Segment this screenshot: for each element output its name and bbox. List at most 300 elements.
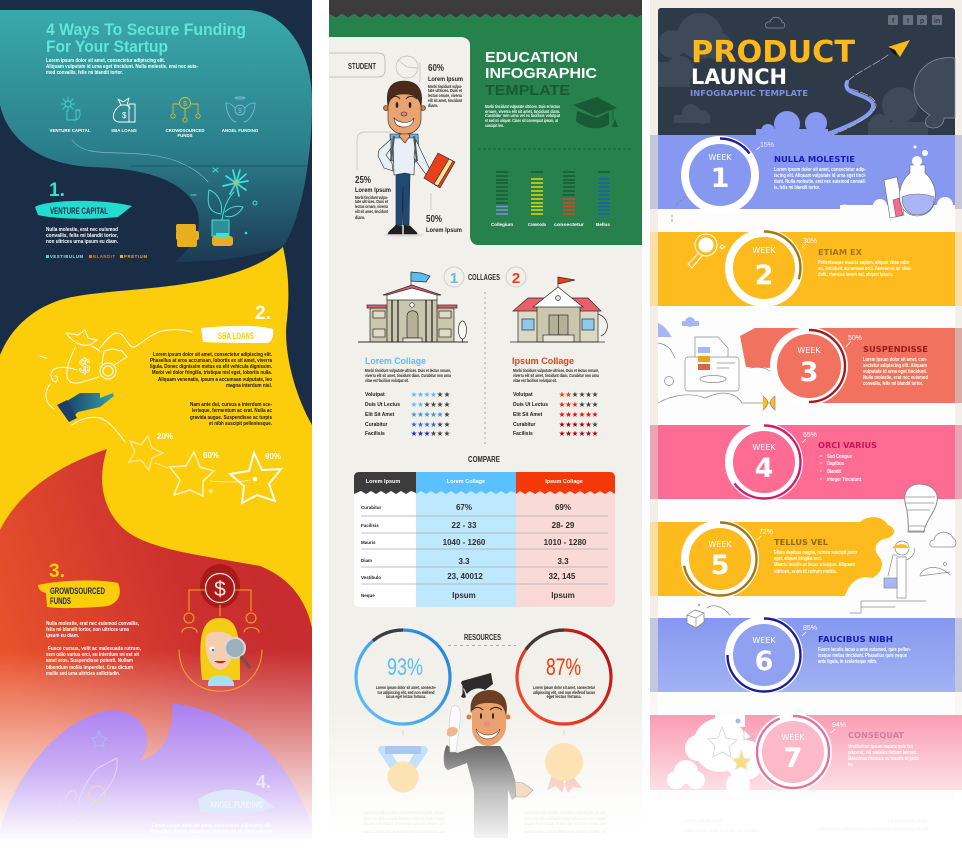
stat ring 87 percent: adipiscing elit, sed non eleifend lacus bbox=[533, 690, 595, 695]
college one ratings: ★★★ bbox=[430, 429, 451, 438]
faded footer text: Lorem ipsum dolor bbox=[888, 818, 929, 823]
step 1 label: VENTURE CAPITAL bbox=[50, 206, 108, 216]
college one ratings bbox=[365, 390, 451, 438]
icon: graduation cap bbox=[573, 97, 618, 128]
step 3 text: amet eros. Suspendisse potenti. Nullam bbox=[46, 658, 134, 664]
social icons bbox=[888, 15, 942, 25]
star rating 90%: 90% bbox=[265, 452, 281, 461]
template text: suscipit leo. bbox=[485, 123, 504, 128]
week 2 ring: WEEK bbox=[752, 246, 776, 255]
college one ratings: ★★ bbox=[437, 390, 451, 399]
step 2 paragraph two bbox=[190, 402, 273, 427]
title: 4 Ways To Secure Funding bbox=[46, 20, 246, 39]
row labels: Facilisis bbox=[361, 523, 379, 528]
bar labels: consectetur bbox=[554, 222, 584, 227]
stat ring 87 percent bbox=[517, 630, 611, 724]
product launch title bbox=[690, 35, 856, 98]
college one description: vitae est facilisis volutpat sit. bbox=[365, 378, 409, 383]
colleges heading bbox=[444, 267, 526, 287]
icon: paper plane bbox=[888, 40, 910, 57]
week 4 text: Sed Congue bbox=[827, 454, 852, 460]
graduate character bbox=[444, 673, 533, 838]
resources heading bbox=[448, 633, 516, 646]
step 3 text: ipsum eu diam. bbox=[46, 633, 80, 639]
icon: hand bbox=[57, 393, 114, 422]
icon labels: SBA LOANS bbox=[111, 128, 137, 133]
week 5 text: TELLUS VEL bbox=[774, 538, 828, 547]
week 4 text: Blandit bbox=[827, 469, 841, 475]
week 7 text: in. bbox=[848, 762, 854, 768]
header panel: t bbox=[907, 18, 910, 25]
icon: dollar network bbox=[179, 564, 262, 691]
faded awards text left: aliquam erat volutpat. Ut wisi enim ad minim veniam, quis bbox=[363, 821, 446, 826]
week 2 text: Pellentesque mauris sapien, aliquet vitae odio bbox=[818, 260, 909, 266]
college two ratings bbox=[513, 390, 599, 438]
header panel: f bbox=[892, 18, 895, 25]
step 4 label bbox=[198, 790, 274, 815]
college two ratings: ★★★★ bbox=[572, 390, 599, 399]
legend: VESTIBULUM bbox=[50, 254, 84, 259]
icon labels: VENTURE CAPITAL bbox=[50, 128, 91, 133]
intro text: mod convallis, felis mi blandit tortor. bbox=[46, 70, 124, 76]
cloud with stars illustration bbox=[667, 715, 765, 797]
week 3 text: SUSPENDISSE bbox=[863, 345, 928, 354]
resources heading: RESOURCES bbox=[464, 633, 501, 642]
legend: BLANDIT bbox=[93, 254, 115, 259]
title: For Your Startup bbox=[46, 37, 168, 56]
star rating 90% bbox=[230, 452, 281, 503]
stat 25 percent: elit sit amet, tincidunt bbox=[355, 209, 388, 214]
college one ratings: Volutpat bbox=[365, 392, 385, 398]
faded awards text left bbox=[363, 810, 446, 834]
stat 25 percent bbox=[355, 132, 391, 220]
row values: 3.3 bbox=[557, 557, 569, 566]
template text: Curabitur non urna vel ex facilisis volutpat bbox=[485, 113, 560, 118]
stat 60 percent: Lorem Ipsum bbox=[428, 77, 463, 83]
week 6 text bbox=[818, 635, 911, 665]
step 4 number: 4. bbox=[256, 772, 271, 792]
step 2 paragraph one bbox=[150, 352, 273, 389]
week 6 percent: 85% bbox=[803, 625, 817, 632]
week 3 percent: 50% bbox=[848, 335, 862, 342]
icon: rosette bbox=[545, 743, 583, 793]
icon: cube bbox=[687, 604, 730, 628]
college two ratings: Volutpat bbox=[513, 392, 533, 398]
week 3 percent bbox=[846, 335, 862, 347]
intro text: Aliquam vulputate id urna eget tincidunt. Nulla molestie, erat nec auis- bbox=[46, 64, 198, 70]
purple shape bbox=[0, 703, 312, 858]
stat ring 93 percent: Lorem ipsum dolor sit amet, consecte- bbox=[376, 685, 436, 690]
stat 25 percent: diam. bbox=[355, 215, 365, 220]
step 2 paragraph one: Phasellus at eros accumsan, lobortis ex sit amet, viverra bbox=[150, 358, 272, 364]
week 2 text: dolit, rhoncus lorem vel, aliquet ipsum. bbox=[818, 272, 893, 278]
stat ring 93 percent bbox=[356, 630, 450, 724]
faded awards text right: nostrud exerci tation ullamcorper suscipit lobortis nisl bbox=[524, 829, 606, 834]
week 2 text: ETIAM EX bbox=[818, 248, 863, 257]
icon: angel funding: $ bbox=[238, 108, 242, 115]
week 3 ring: 3 bbox=[800, 357, 818, 388]
week 7 text bbox=[848, 731, 919, 768]
bar labels: Commodo bbox=[528, 222, 546, 227]
step 3 text: felis mi blandit tortor, non ultrices urna bbox=[46, 627, 129, 633]
week 4 ring: WEEK bbox=[752, 443, 776, 452]
yellow shape bbox=[0, 247, 312, 858]
icon labels bbox=[50, 128, 259, 138]
week 5 text: ultrices, enim id rutrum mattis. bbox=[774, 569, 838, 575]
week 4 band bbox=[650, 425, 962, 499]
faded awards text left: Lorem ipsum dolor sit amet, consectetur adipiscing elit, sed diam bbox=[363, 810, 445, 815]
header clouds bbox=[658, 13, 928, 136]
stat 60 percent: Morbi tincidunt vulpu- bbox=[428, 84, 462, 89]
step 3 text bbox=[46, 621, 142, 677]
row values: 23, 40012 bbox=[447, 572, 483, 581]
college one description: Lorem Collage bbox=[365, 356, 426, 366]
college two ratings: ★★★ bbox=[579, 400, 599, 409]
week 6 text: FAUCIBUS NIBH bbox=[818, 635, 893, 644]
week 7 ring: 7 bbox=[784, 743, 802, 774]
stat 25 percent: tate ultrices. Duis et bbox=[355, 199, 388, 204]
college one ratings: ★★★★★ bbox=[411, 410, 444, 419]
college one ratings: Facilisis bbox=[365, 431, 385, 437]
stat 60 percent: lectus ornare, viverra bbox=[428, 93, 462, 98]
step 1 text: Nulla molestie, erat nec euismod bbox=[46, 227, 118, 233]
icon labels: CROWDSOURCED bbox=[165, 128, 205, 133]
product launch title: LAUNCH bbox=[691, 65, 787, 89]
week 4 text bbox=[818, 441, 877, 483]
college one ratings: Duis Ut Lectus bbox=[365, 402, 400, 408]
icon: gold coins bbox=[176, 224, 233, 247]
faded awards text left: nostrud exerci tation ullamcorper suscipit lobortis nisl bbox=[363, 829, 445, 834]
row values bbox=[443, 503, 587, 600]
product launch title: INFOGRAPHIC TEMPLATE bbox=[690, 89, 808, 98]
intro text: Lorem ipsum dolor sit amet, consectetur adipiscing elit. bbox=[46, 58, 166, 64]
step 1 label bbox=[35, 201, 132, 219]
stat ring 87 percent: eget lectus fortuna. bbox=[546, 694, 582, 699]
icon: money bag bbox=[113, 98, 135, 122]
week 4 percent bbox=[802, 432, 817, 443]
week 6 ring bbox=[728, 618, 800, 692]
week 3 text: vulputate id urna eget tincidunt. bbox=[863, 369, 928, 375]
stat 60 percent bbox=[428, 63, 463, 108]
icon: money bag and ring: $ bbox=[79, 356, 90, 378]
student tag bbox=[329, 53, 385, 77]
icon: light bulb person bbox=[850, 484, 956, 613]
row values: 1010 - 1280 bbox=[544, 538, 587, 547]
product launch title: PRODUCT bbox=[691, 35, 856, 70]
template text: et sed mi aliquet. Class sit consequat ipsum, at bbox=[485, 118, 558, 123]
step 3 text: mollis sed urna ultricies sollicitudin. bbox=[46, 671, 121, 677]
week 3 ring bbox=[770, 327, 848, 405]
student character bbox=[378, 81, 455, 237]
stat 50 percent bbox=[426, 193, 462, 234]
connector line bbox=[72, 140, 208, 182]
step 4 text: Lorem ipsum dolor sit amet, consectetur adipiscing elit. bbox=[152, 823, 273, 829]
week 1 text bbox=[774, 155, 866, 191]
step 1 text: convallis, felis mi blandit tortor, bbox=[46, 233, 119, 239]
week 1 text: is, felis mi blandit tortor. bbox=[774, 185, 820, 191]
teal header shape bbox=[0, 10, 312, 262]
step 2 paragraph two: et nibh suscipit pellentesque. bbox=[209, 421, 273, 427]
week 3 text: Nulla molestie, erat nec euismod bbox=[863, 375, 928, 381]
icon: document and cloud illustration bbox=[658, 317, 778, 410]
college one ratings: ★★★★ bbox=[411, 390, 437, 399]
week 5 band bbox=[650, 484, 956, 613]
dotted progress path bbox=[155, 463, 250, 482]
stat ring 93 percent: tur adipiscing elit, sed non eleifend bbox=[378, 690, 435, 695]
step 3 text: sem odio varius orci, eu interdum mi est sit bbox=[46, 652, 139, 658]
college two description: Morbi tincidunt vulputate ultrices. Duis et lectus ornare, bbox=[513, 368, 599, 373]
week 6 ring: 6 bbox=[755, 646, 773, 677]
table header bbox=[354, 472, 416, 494]
week 1 ring: WEEK bbox=[708, 153, 732, 162]
row labels: Diam bbox=[361, 558, 372, 563]
college one description: Morbi tincidunt vulputate ultrices. Duis et lectus ornare, bbox=[365, 368, 451, 373]
row labels: Vestibulo bbox=[361, 575, 381, 580]
college two ratings: Curabitur bbox=[513, 422, 536, 428]
colleges heading: 2 bbox=[512, 270, 520, 287]
compare table: Ipsum Collage bbox=[545, 479, 583, 485]
week 4 ring bbox=[728, 426, 800, 498]
row values: 1040 - 1260 bbox=[443, 538, 486, 547]
college two ratings: Facilisis bbox=[513, 431, 533, 437]
step 1 text: non ultrices urna ipsum eu diam. bbox=[46, 239, 119, 245]
week 6 percent bbox=[802, 625, 817, 636]
stat ring 93 percent: 93% bbox=[387, 654, 423, 681]
icon: medal bbox=[378, 746, 428, 792]
week 5 ring bbox=[684, 522, 756, 596]
legend bbox=[46, 254, 148, 259]
stat 25 percent: Lorem Ipsum bbox=[355, 188, 391, 194]
week 1 text: dunt. Nulla molestie, erat nec euismod convall- bbox=[774, 179, 866, 185]
college two ratings: ★ bbox=[592, 420, 599, 429]
college one ratings: ★★ bbox=[411, 400, 424, 409]
week 6 text: Fusce iaculis lacus a ante euismod, quis pellen- bbox=[818, 647, 911, 653]
week 3 text bbox=[863, 345, 928, 387]
icon: lab flasks bbox=[884, 146, 935, 218]
week 7 percent: 94% bbox=[832, 722, 846, 729]
template title bbox=[485, 49, 597, 99]
row labels bbox=[361, 505, 381, 598]
week 1 cloud bbox=[840, 196, 955, 214]
college two ratings: ★★ bbox=[559, 390, 572, 399]
week 2 text bbox=[818, 248, 911, 278]
faded footer text bbox=[683, 818, 929, 833]
step 2 paragraph two: lerisque, fermentum ac erat. Nulla ac bbox=[192, 408, 272, 414]
icon labels: FUNDS bbox=[177, 133, 193, 138]
week 7 text: CONSEQUAT bbox=[848, 731, 905, 740]
template text: Morbi tincidunt vulputate ultrices. Duis et lectus bbox=[485, 104, 560, 109]
outlined header clouds bbox=[765, 17, 955, 128]
step 2 label: SBA LOANS bbox=[218, 331, 254, 341]
college one ratings: ★★ bbox=[437, 420, 451, 429]
stat ring 87 percent: Lorem ipsum dolor sit amet, consectetur bbox=[533, 685, 595, 690]
week 7 text: placerat, vel sodales dictum laoreet. bbox=[848, 750, 917, 756]
college two ratings: ★★★★★★ bbox=[559, 410, 599, 419]
stat 25 percent: Morbi tincidunt vulpu- bbox=[355, 195, 388, 200]
step 3 label: GROWDSOURCED bbox=[50, 586, 105, 596]
header panel bbox=[658, 8, 955, 138]
week 6 band bbox=[650, 604, 962, 692]
bar labels bbox=[491, 222, 610, 227]
star rating 60% bbox=[170, 451, 219, 496]
template text bbox=[485, 104, 560, 128]
compare table: Lorem Ipsum bbox=[366, 479, 400, 485]
stat 60 percent: elit sit amet, tincidunt bbox=[428, 98, 462, 103]
row labels: Neque bbox=[361, 593, 375, 598]
week 3 band bbox=[658, 317, 962, 410]
week 5 ring: 5 bbox=[711, 550, 729, 581]
week 3 text: convallis, felis mi blandit tortor. bbox=[863, 381, 923, 387]
week 2 ring bbox=[728, 232, 800, 304]
step 4 text: Phasellus at eros accumsan, lobortis ex sit amet, viverra bbox=[150, 829, 272, 835]
week 1 band bbox=[650, 135, 962, 222]
compare heading: COMPARE bbox=[468, 455, 501, 464]
icon: magnifier bbox=[688, 234, 725, 268]
college two description: Ipsum Collage bbox=[512, 356, 574, 366]
row values: 22 - 33 bbox=[452, 521, 477, 530]
faded awards text right: Lorem ipsum dolor sit amet, consectetur adipiscing elit, sed diam bbox=[524, 810, 606, 815]
week 4 text: ORCI VARIUS bbox=[818, 441, 877, 450]
header panel: p bbox=[920, 18, 924, 25]
stat 60 percent: 60% bbox=[428, 63, 444, 74]
college one ratings: ★★★★ bbox=[411, 420, 437, 429]
week 1 text: Lorem ipsum dolor sit amet, consectetur adip- bbox=[774, 167, 866, 173]
step 2 paragraph one: Lorem ipsum dolor sit amet, consectetur adipiscing elit. bbox=[153, 352, 273, 358]
icon: angel funding bbox=[226, 97, 255, 122]
star rating 20%: 20% bbox=[157, 432, 173, 441]
step 4 faded rocket bbox=[60, 731, 117, 820]
faded footer text: Lorem ipsum dolor bbox=[683, 818, 724, 823]
compare table: Lorem Collage bbox=[447, 479, 485, 485]
icon: money bag: $ bbox=[122, 111, 127, 120]
week 5 percent bbox=[757, 529, 773, 540]
row values: 3.3 bbox=[458, 557, 470, 566]
college two ratings: ★★★★★ bbox=[559, 420, 592, 429]
college one ratings: Elit Sit Amet bbox=[365, 412, 395, 418]
step 1 number: 1. bbox=[49, 180, 65, 201]
stat 60 percent: diam. bbox=[428, 103, 438, 108]
week 5 text bbox=[774, 538, 857, 575]
stat 25 percent: 25% bbox=[355, 175, 371, 186]
week 4 text: Integer Tincidunt bbox=[827, 477, 861, 483]
week 7 ring: WEEK bbox=[781, 733, 805, 742]
intro text bbox=[46, 58, 198, 76]
week 7 band bbox=[650, 713, 962, 797]
stat 50 percent: 50% bbox=[426, 214, 442, 225]
week 1 ring: 1 bbox=[711, 163, 729, 194]
stat ring 87 percent: 87% bbox=[546, 654, 581, 681]
colleges heading: COLLAGES bbox=[468, 273, 500, 282]
week 5 ring: WEEK bbox=[708, 540, 732, 549]
college two description: viverra elit sit amet, tincidunt diam. Curabitur non urna bbox=[513, 373, 599, 378]
college two description: vitae est facilisis volutpat sit. bbox=[513, 378, 557, 383]
step 2 paragraph one: magna interdum nisl. bbox=[226, 383, 273, 389]
faded footer text: Lorem ipsum dolor sit amet, consectetur bbox=[683, 828, 759, 833]
step 2 paragraph one: Aliquam venenatis, ipsum a accumsan vulputate, leo bbox=[158, 377, 272, 383]
faded awards text right: nonummy nibh euismod tincidunt ut laoreet dolore magna bbox=[524, 816, 606, 821]
college two ratings: Duis Ut Lectus bbox=[513, 402, 548, 408]
template title: TEMPLATE bbox=[485, 82, 570, 99]
week 2 text: eu, tincidunt accumsan orci. Aenean at mi vitae bbox=[818, 266, 911, 272]
step 3 label: FUNDS bbox=[50, 596, 71, 606]
week 5 percent: 72% bbox=[759, 529, 773, 536]
red shape bbox=[0, 449, 312, 858]
stat 60 percent: tate ultrices. Duis et bbox=[428, 88, 462, 93]
building: Ipsum college bbox=[510, 277, 607, 342]
building: Lorem college bbox=[358, 272, 468, 342]
college one description bbox=[365, 356, 451, 383]
row values: 67% bbox=[456, 503, 472, 512]
week 6 text: tesque metus tincidunt. Phasellus quis neque bbox=[818, 653, 907, 659]
step 3 number: 3. bbox=[49, 561, 65, 582]
bar labels: Bellus bbox=[596, 222, 610, 227]
faded footer text: Lorem ipsum dolor sit amet, consectetur adipiscing elit sed bbox=[817, 826, 928, 831]
week 7 text: Maecenas rhoncus eu mauris id justo bbox=[848, 756, 919, 762]
icon: flower and pot bbox=[191, 168, 257, 236]
college one ratings: ★ bbox=[444, 410, 451, 419]
woman with magnifier bbox=[200, 618, 250, 686]
icon: dollar network: $ bbox=[214, 578, 226, 601]
week 1 percent: 15% bbox=[760, 142, 774, 149]
step 4 label: ANGEL FUNDING bbox=[210, 800, 263, 810]
student tag: STUDENT bbox=[348, 62, 376, 71]
row values: Ipsum bbox=[551, 591, 575, 600]
icon labels: ANGEL FUNDING bbox=[222, 128, 259, 133]
row values: 69% bbox=[555, 503, 571, 512]
fade over red bbox=[0, 650, 312, 858]
week 4 percent: 65% bbox=[803, 432, 817, 439]
step 3 text: Fusce cursus, velit ac malesuada rutrum, bbox=[48, 646, 142, 652]
panel: startup funding infographic bbox=[0, 0, 312, 858]
week 5 text: Mauris iaculis at lacus tristique. Aliquam bbox=[774, 562, 855, 568]
winding road bbox=[825, 55, 888, 135]
faded awards text right bbox=[524, 810, 607, 834]
step 1 text bbox=[46, 227, 119, 245]
week 7 ring bbox=[754, 713, 832, 791]
week 6 text: ante ligula, in scelerisque nibh. bbox=[818, 659, 877, 665]
faded awards text left: nonummy nibh euismod tincidunt ut laoreet dolore magna bbox=[363, 816, 445, 821]
college one ratings: ★★★ bbox=[411, 429, 431, 438]
row labels: Mauris bbox=[361, 540, 376, 545]
title bbox=[46, 20, 246, 56]
panel: education infographic bbox=[329, 0, 642, 858]
week 2 ring: 2 bbox=[755, 260, 773, 291]
step 3 text: bibendum mollis imperdiet. Cras dictum bbox=[46, 665, 134, 671]
step 3 label bbox=[38, 581, 120, 608]
row values: Ipsum bbox=[452, 591, 476, 600]
college one ratings: Curabitur bbox=[365, 422, 388, 428]
week 1 text: NULLA MOLESTIE bbox=[774, 155, 855, 164]
icon: money bag and ring bbox=[40, 330, 192, 442]
step 4 text bbox=[150, 823, 273, 835]
top dark band bbox=[329, 0, 642, 18]
stat 50 percent: Lorem Ipsum bbox=[426, 228, 462, 234]
bar chart bbox=[496, 172, 610, 214]
college one ratings: ★★★★ bbox=[424, 400, 451, 409]
icon: crowdsourced funds bbox=[171, 98, 200, 122]
pie icon bbox=[396, 56, 420, 82]
week 5 text: Etiam dapibus magna, rutrum suscipit justo bbox=[774, 550, 857, 556]
step 2 number: 2. bbox=[255, 303, 271, 324]
icon: venture capital bbox=[61, 97, 80, 120]
week 7 percent bbox=[831, 722, 846, 733]
week 4 ring: 4 bbox=[755, 453, 773, 484]
legend: PRETIUM bbox=[124, 254, 148, 259]
icon: crowdsourced funds: $ bbox=[183, 101, 187, 108]
week 5 text: eget, aliquet fringilla orci. bbox=[774, 556, 822, 562]
college two ratings: ★★★ bbox=[559, 400, 579, 409]
panel: product launch infographic bbox=[650, 0, 962, 858]
